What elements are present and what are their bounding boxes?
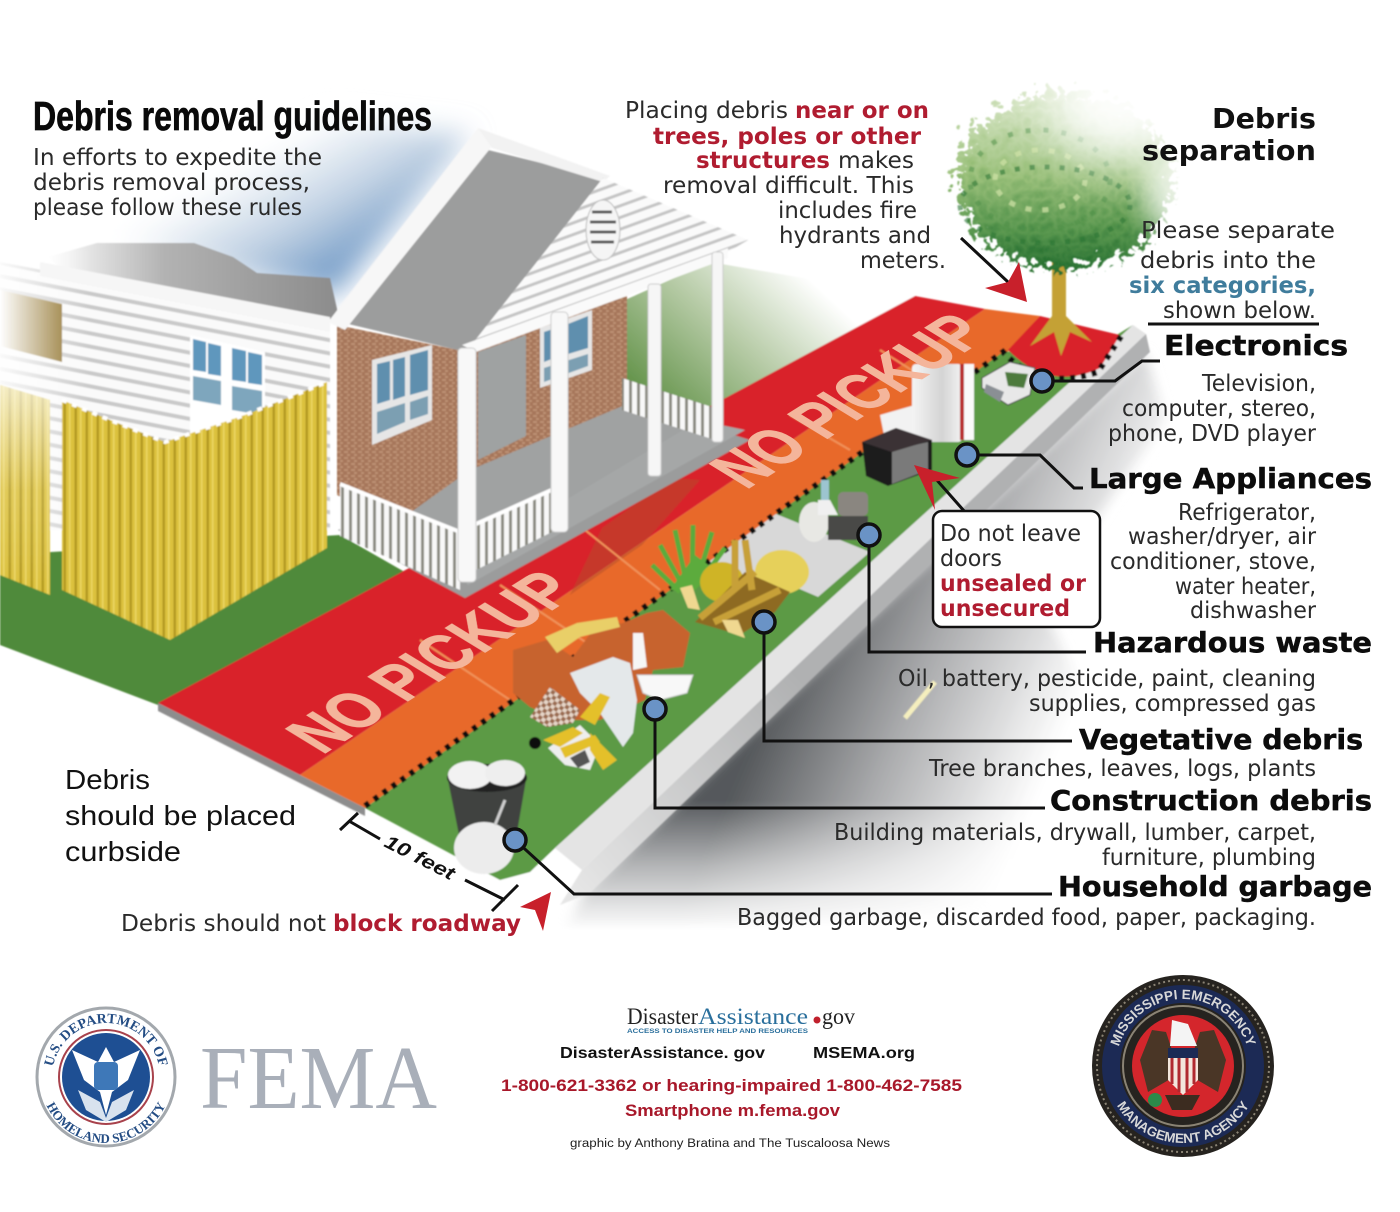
- leader: construction debris: [644, 698, 1045, 808]
- left lawn: [0, 535, 410, 705]
- grass tuft: [652, 525, 728, 592]
- website links: [560, 1045, 915, 1062]
- sidewalk joints: [420, 350, 935, 700]
- illustration: street scene: [0, 47, 1205, 960]
- leader: vegetative debris: [753, 611, 1072, 741]
- phone numbers: Smartphone m.fema.gov: [625, 1101, 841, 1120]
- door: [478, 335, 526, 460]
- no pickup label near sidewalk: NO PICKUP: [271, 561, 593, 763]
- category: construction debris: Building materials, drywall, lumber, carpet,: [834, 820, 1316, 846]
- leader: hazardous waste: [858, 524, 1086, 652]
- category: vegetative debris: [928, 723, 1363, 782]
- leader: electronics: [1031, 361, 1160, 392]
- DisasterAssistance logo: ACCESS TO DISASTER HELP AND RESOURCES: [627, 1028, 809, 1035]
- category: hazardous waste: supplies, compressed gas: [1029, 691, 1316, 717]
- left window shutter: [0, 290, 62, 362]
- crown right fade: [1145, 145, 1205, 235]
- gable vent: [586, 200, 620, 260]
- callout: doors warning: unsealed or: [940, 571, 1087, 597]
- driveway: [700, 514, 870, 597]
- seal: Mississippi Emergency Management Agency: [1092, 975, 1274, 1157]
- debris: construction: [513, 610, 693, 770]
- leader: large appliances: [956, 444, 1083, 488]
- sidewalk edge: [158, 703, 365, 816]
- category: household garbage: Household garbage: [1058, 870, 1372, 903]
- tree trunk: [1030, 262, 1092, 356]
- column back: [648, 284, 661, 476]
- callout: doors warning: unsecured: [940, 596, 1070, 622]
- debris: household garbage: [447, 760, 527, 874]
- FEMA wordmark: FEMA: [200, 1029, 437, 1128]
- tree: [947, 47, 1205, 356]
- main roof: [48, 243, 340, 322]
- heading: debris separation: separation: [1142, 134, 1316, 167]
- porch floor: [400, 405, 745, 585]
- category: hazardous waste: Hazardous waste: [1093, 626, 1372, 659]
- gable siding: [466, 178, 748, 352]
- callout: doors warning: [933, 511, 1100, 627]
- wall left fade: [0, 250, 90, 530]
- text: debris placed curbside: should be placed: [65, 800, 296, 831]
- category: large appliances: Large Appliances: [1089, 462, 1372, 495]
- tree crown: [947, 84, 1163, 260]
- callout: doors warning: Do not leave: [940, 521, 1081, 547]
- intro text: In efforts to expedite the: [33, 145, 322, 171]
- brick wall back: [470, 296, 627, 475]
- category: large appliances: dishwasher: [1190, 598, 1317, 624]
- leader: household garbage: [504, 829, 1052, 894]
- column front: [458, 348, 476, 582]
- main house: [0, 243, 340, 530]
- category: electronics: Electronics: [1164, 329, 1348, 362]
- 10 feet dimension: 10 feet: [381, 832, 459, 885]
- seal: Department of Homeland Security: [36, 1006, 176, 1148]
- left railing: [340, 484, 460, 590]
- crown leaf texture: [960, 130, 1130, 243]
- arrow to tree: [961, 238, 1027, 302]
- seal: Department of Homeland Security: HOMELAND SECURITY: [46, 1101, 165, 1143]
- note: placing debris near structures: makes: [838, 148, 914, 174]
- text: debris placed curbside: curbside: [65, 836, 181, 867]
- text: debris placed curbside: Debris: [65, 764, 150, 795]
- category: household garbage: [737, 870, 1372, 931]
- category: electronics: phone, DVD player: [1108, 421, 1317, 447]
- sky reflection behind roof: [100, 120, 470, 295]
- intro text: please follow these rules: [33, 195, 302, 221]
- front railing: [476, 488, 556, 570]
- heading: debris separation: Debris: [1212, 102, 1316, 135]
- category: hazardous waste: [898, 626, 1372, 717]
- separation instructions: Please separate: [1141, 218, 1335, 244]
- debris: electronics: [982, 362, 1035, 405]
- seal: Department of Homeland Security: U.S. DEPARTMENT OF: [44, 1014, 168, 1065]
- DisasterAssistance logo: Disaster: [627, 1004, 698, 1029]
- DisasterAssistance logo: gov: [822, 1004, 855, 1029]
- porch house: [328, 128, 750, 598]
- separation instructions: six categories,: [1129, 273, 1316, 299]
- curb face: [560, 334, 1150, 905]
- category: large appliances: conditioner, stove,: [1110, 549, 1316, 575]
- category: construction debris: [834, 784, 1372, 871]
- note: do not block roadway: block roadway: [333, 911, 521, 937]
- category: hazardous waste: Oil, battery, pesticide, paint, cleaning: [898, 666, 1316, 692]
- DisasterAssistance logo: [627, 1004, 855, 1035]
- note: placing debris near structures: structures: [696, 148, 830, 174]
- porch base: [338, 400, 750, 598]
- credit: graphic by Anthony Bratina and The Tuscaloosa News: [570, 1138, 890, 1150]
- note: do not block roadway: [121, 911, 521, 937]
- text: debris placed curbside: [65, 764, 296, 867]
- no pickup zone: red strip: [158, 296, 985, 775]
- title: Debris removal guidelines: [33, 93, 432, 139]
- eave: [40, 262, 330, 332]
- note: placing debris near structures: removal difficult. This: [663, 173, 914, 199]
- no pickup zone: orange strip: [300, 309, 1040, 808]
- main house wall: [0, 262, 330, 530]
- note: placing debris near structures: meters.: [860, 248, 946, 274]
- seal: Mississippi Emergency Management Agency: MISSISSIPPI EMERGENCY: [1110, 990, 1256, 1046]
- road and shadow: [480, 352, 1200, 960]
- back window: [540, 310, 592, 388]
- intro text: debris removal process,: [33, 170, 310, 196]
- separation instructions: shown below.: [1163, 298, 1316, 324]
- category: large appliances: [1089, 462, 1372, 624]
- separation instructions: [1129, 218, 1335, 324]
- porch floor inner: [400, 405, 700, 560]
- category: vegetative debris: Vegetative debris: [1079, 723, 1363, 756]
- note: placing debris near structures: trees, poles or other: [653, 124, 922, 150]
- callout: doors warning arrow: [914, 465, 965, 512]
- category: construction debris: furniture, plumbing: [1102, 845, 1316, 871]
- debris: large appliances: [862, 364, 974, 486]
- front window: [372, 345, 432, 445]
- roof fascia: [328, 128, 497, 330]
- verge patch under branches: [690, 585, 818, 640]
- intro text: [33, 145, 322, 221]
- phone numbers: [501, 1076, 962, 1120]
- fence main: [62, 382, 327, 640]
- note: placing debris near structures: Placing debris: [625, 98, 788, 124]
- category: large appliances: Refrigerator,: [1178, 500, 1316, 526]
- website links: DisasterAssistance. gov: [560, 1045, 765, 1062]
- road lane marks: [905, 682, 935, 718]
- crown white fade: [1045, 47, 1205, 163]
- 10 feet dimension: [340, 813, 518, 911]
- note: do not block roadway: Debris should not: [121, 911, 326, 937]
- no pickup boundary dotted line: [365, 335, 1122, 806]
- seal: Mississippi Emergency Management Agency: MANAGEMENT AGENCY: [1117, 1100, 1248, 1143]
- arrow: roadway: [520, 892, 551, 931]
- curb top: [555, 325, 1146, 870]
- category: construction debris: Construction debris: [1050, 784, 1372, 817]
- callout: doors warning: doors: [940, 546, 1002, 572]
- back railing: [622, 378, 715, 440]
- website links: MSEMA.org: [813, 1045, 915, 1062]
- category: electronics: computer, stereo,: [1122, 396, 1316, 422]
- fence left: [0, 385, 50, 595]
- logs and branches: [695, 572, 790, 635]
- phone numbers: 1-800-621-3362 or hearing-impaired 1-800-462-7585: [501, 1076, 962, 1095]
- category: electronics: Television,: [1201, 371, 1316, 397]
- category: large appliances: water heater,: [1175, 574, 1316, 600]
- leaf pile: [755, 550, 809, 594]
- grass verge: [365, 325, 1133, 880]
- heading: debris separation: [1142, 102, 1316, 167]
- no pickup label far sidewalk: NO PICKUP: [695, 304, 1004, 498]
- debris: vegetative: [652, 525, 809, 638]
- separation instructions: debris into the: [1140, 248, 1316, 274]
- DisasterAssistance logo: Assistance: [698, 1004, 808, 1029]
- column far right: [712, 252, 723, 442]
- main window: [190, 335, 265, 455]
- right lawn: [625, 262, 915, 435]
- sidewalk darker section: [570, 478, 700, 595]
- brick wall left: [337, 325, 468, 560]
- category: vegetative debris: Tree branches, leaves, logs, plants: [928, 756, 1316, 782]
- gable beam: [462, 248, 728, 352]
- column middle: [551, 312, 568, 532]
- porch roof: [340, 150, 603, 352]
- note: placing debris near structures: near or on: [795, 98, 929, 124]
- note: placing debris near structures: hydrants and: [779, 223, 931, 249]
- category: large appliances: washer/dryer, air: [1128, 524, 1317, 550]
- mulch around tree: [1008, 316, 1120, 377]
- debris: hazardous waste: [799, 480, 868, 542]
- category: household garbage: Bagged garbage, discarded food, paper, packaging.: [737, 905, 1316, 931]
- note: placing debris near structures: includes fire: [778, 198, 917, 224]
- note: placing debris near structures: [625, 98, 946, 274]
- category: electronics: [1108, 329, 1348, 447]
